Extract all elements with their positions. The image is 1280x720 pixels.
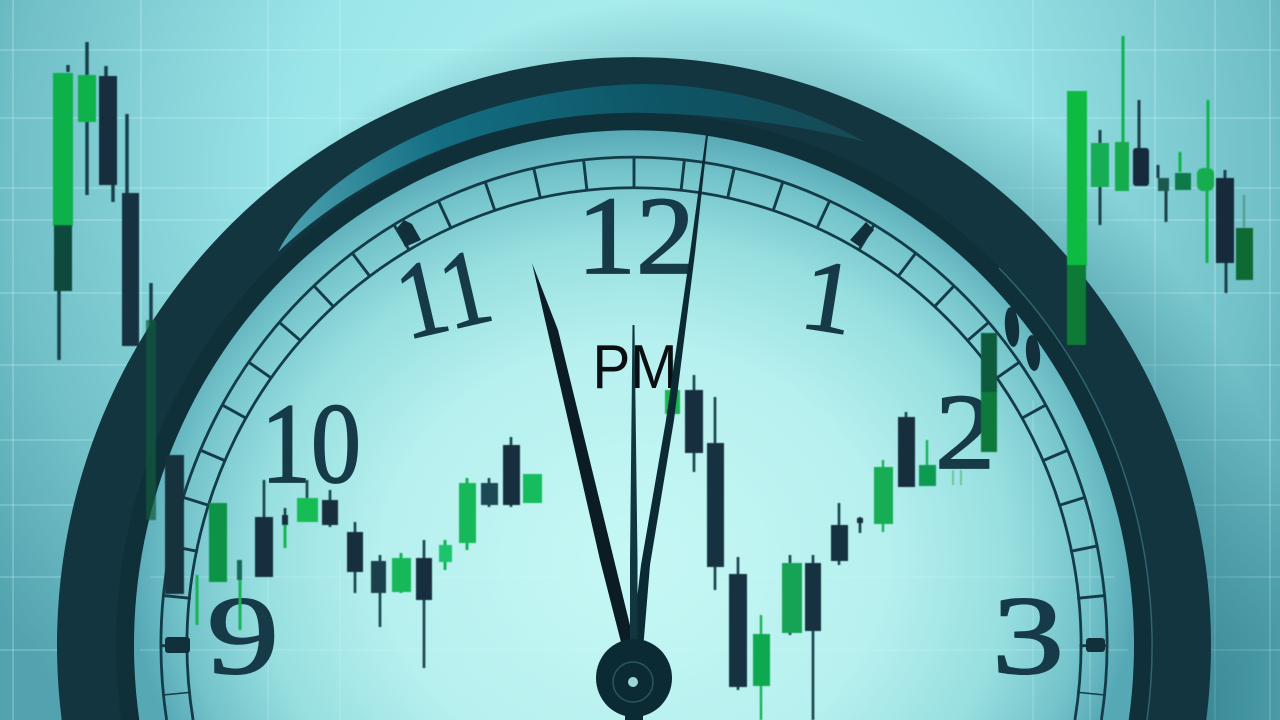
bezel highlight line [999, 268, 1152, 720]
candlesticks: chart across clock left [165, 437, 542, 668]
clock hands [532, 135, 708, 720]
numeral 12: 12 [577, 175, 695, 298]
candlesticks: top left [53, 42, 156, 520]
candlesticks: top right [1067, 36, 1253, 345]
numeral 3: 3 [992, 574, 1064, 698]
clock face [134, 130, 1134, 720]
minute hand [631, 135, 708, 650]
candlesticks: chart across clock right [665, 333, 997, 720]
faint grid on the face [140, 400, 1128, 720]
numeral 11: 11 [386, 226, 502, 363]
bezel glass reflection [278, 84, 865, 252]
numeral 9: 9 [207, 574, 279, 698]
numeral 10: 10 [261, 380, 361, 507]
minute track [161, 157, 1107, 720]
hour marks [165, 220, 1105, 653]
PM label: PM [592, 333, 678, 402]
second hand [630, 325, 638, 650]
center hub [596, 639, 672, 720]
hour hand [532, 263, 636, 650]
clock numerals [207, 175, 1064, 698]
numeral 1: 1 [795, 238, 863, 357]
numeral 2: 2 [935, 373, 995, 492]
bezel inner dark rim [116, 113, 1152, 720]
